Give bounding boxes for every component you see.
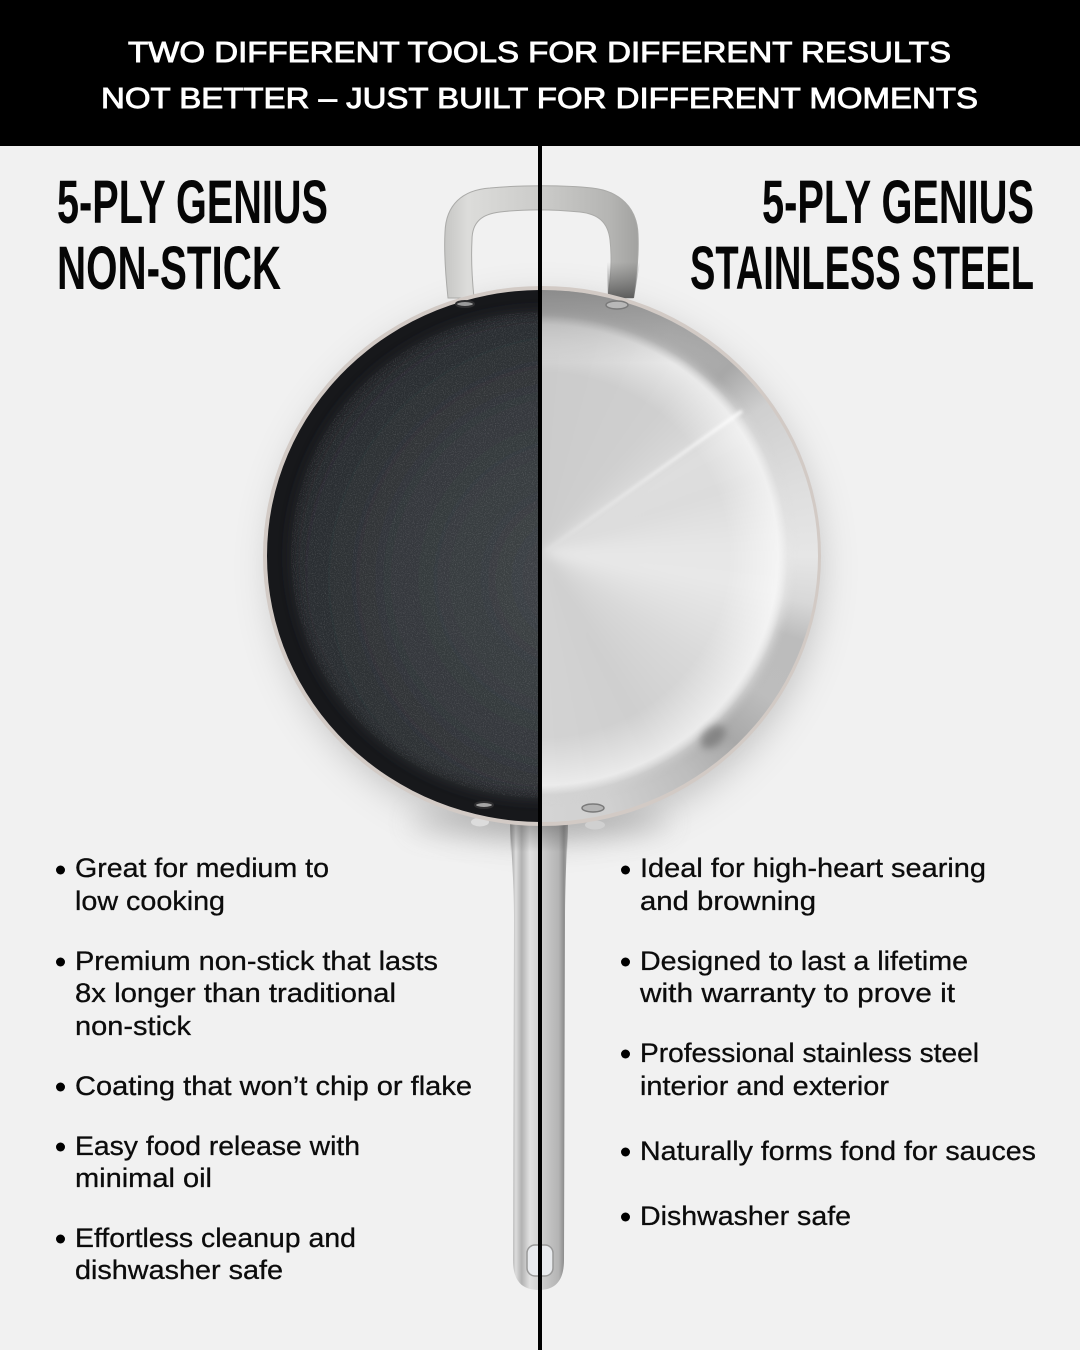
headline line 1: TWO DIFFERENT TOOLS FOR DIFFERENT RESULTS [128, 37, 951, 69]
rivets under the rim [471, 818, 605, 830]
bullet: premium non-stick: Premium non-stick that lasts [75, 946, 438, 976]
rivet: non-stick top [456, 301, 474, 307]
bullet: food release: minimal oil [75, 1163, 212, 1193]
loop handle [445, 186, 640, 298]
headline line 2: NOT BETTER – JUST BUILT FOR DIFFERENT MOMENTS [101, 83, 978, 115]
heading: non-stick [57, 168, 328, 302]
bullet: cleanup: Effortless cleanup and [75, 1223, 356, 1253]
dark rim reflection [698, 722, 728, 751]
bullet: coating: Coating that won’t chip or flake [75, 1071, 472, 1101]
bullet: medium to low: Great for medium to [75, 853, 329, 883]
bullet: professional: interior and exterior [640, 1071, 889, 1101]
pan drop shadow [272, 300, 820, 836]
bullet: cleanup: dishwasher safe [75, 1255, 283, 1285]
bullet: lifetime [621, 946, 968, 1008]
bullet: lifetime: Designed to last a lifetime [640, 946, 968, 976]
bullet: dishwasher: Dishwasher safe [640, 1201, 851, 1231]
bullet: premium non-stick: non-stick [75, 1011, 192, 1041]
heading: non-stick: 5-PLY GENIUS [57, 168, 328, 236]
bullet: professional: Professional stainless steel [640, 1038, 979, 1068]
list: non-stick benefits [56, 853, 472, 1285]
bullet: food release [56, 1131, 360, 1193]
half: non-stick interior [267, 290, 538, 822]
half: stainless interior [542, 290, 818, 822]
bullet: searing: Ideal for high-heart searing [640, 853, 986, 883]
bullet: premium non-stick: 8x longer than traditional [75, 978, 396, 1008]
lower contact shadow [410, 808, 670, 836]
bullet: medium to low [56, 853, 329, 916]
bullet: medium to low: low cooking [75, 886, 225, 916]
pan outer rim [263, 286, 821, 826]
handle hanging hole [527, 1245, 553, 1276]
long handle [510, 815, 568, 1290]
header band [0, 0, 1080, 146]
rivet: stainless bottom [582, 804, 604, 812]
bullet: professional [621, 1038, 979, 1101]
bright radial seam [616, 410, 743, 500]
bullet: fond: Naturally forms fond for sauces [640, 1136, 1036, 1166]
heading: stainless steel [690, 168, 1034, 302]
top interior shading [542, 290, 697, 354]
bullet: premium non-stick [56, 946, 438, 1041]
center divider [538, 146, 542, 1350]
floor edge highlight [542, 320, 782, 792]
heading: non-stick: NON-STICK [57, 234, 281, 302]
bullet: searing [621, 853, 986, 916]
bullet: lifetime: with warranty to prove it [639, 978, 956, 1008]
rivet: stainless top [606, 301, 628, 309]
bullet: food release: Easy food release with [75, 1131, 360, 1161]
rivet: non-stick bottom [475, 802, 493, 808]
bullet: cleanup [56, 1223, 356, 1285]
bullet: searing: and browning [640, 886, 816, 916]
non-stick cooking floor [289, 309, 538, 802]
list: stainless steel benefits [621, 853, 1036, 1231]
pan illustration [263, 186, 830, 1290]
